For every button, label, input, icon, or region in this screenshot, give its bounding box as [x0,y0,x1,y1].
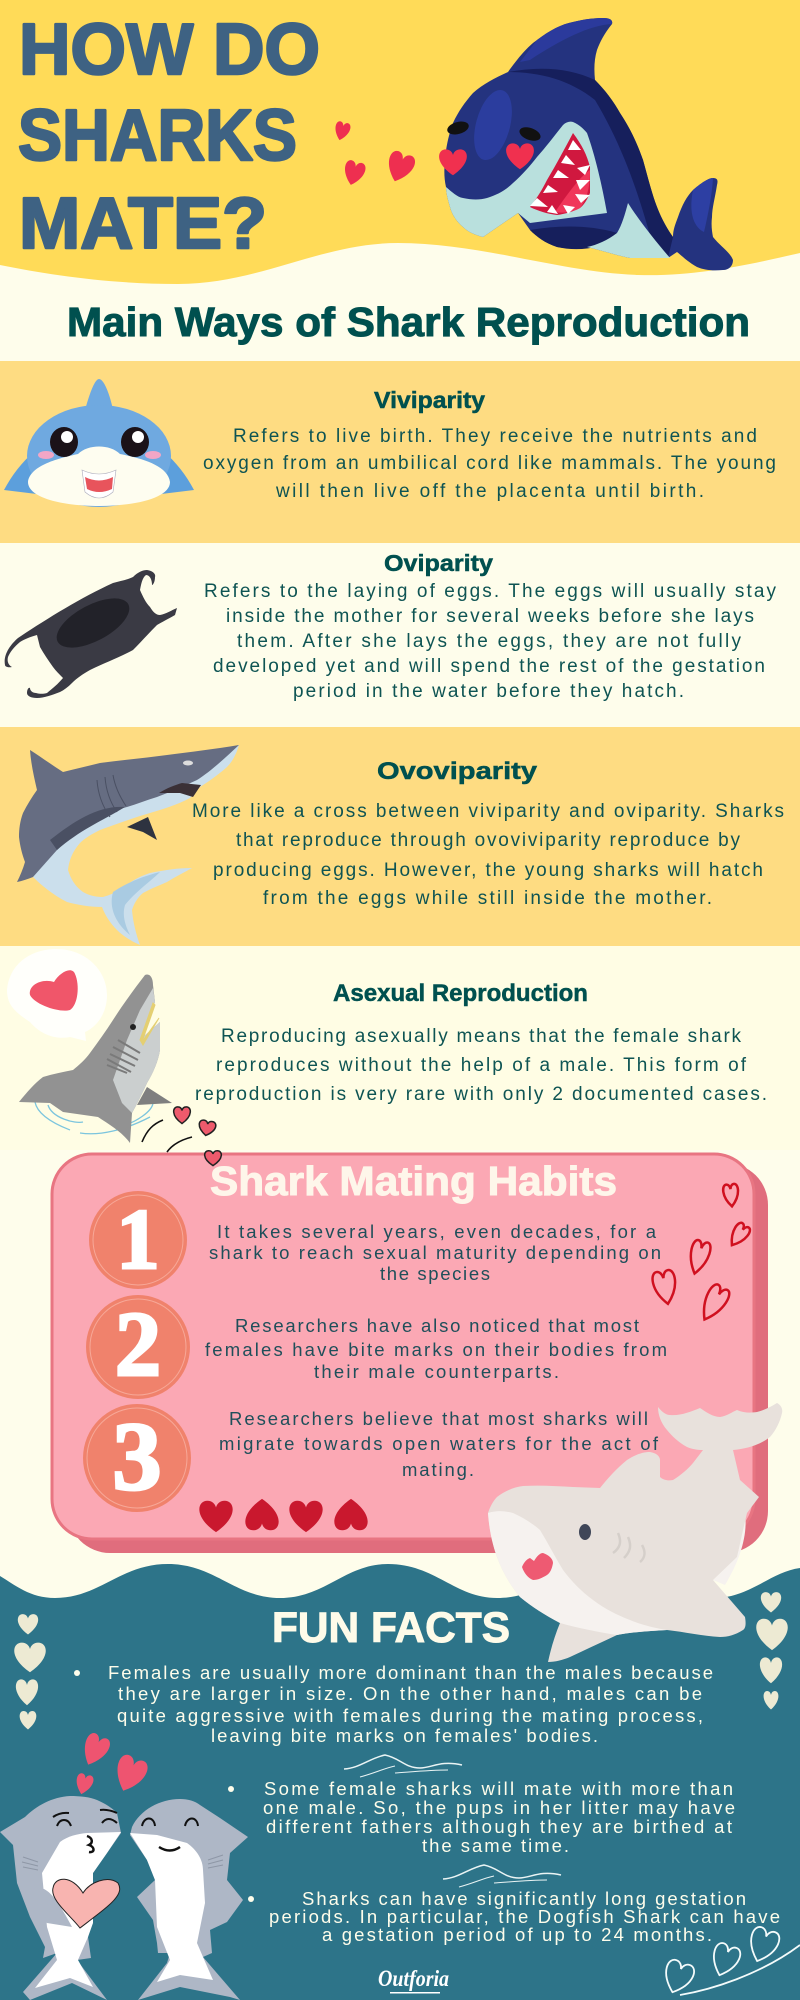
left shark [0,1796,121,2000]
text block: ovoviparity: from the eggs while still inside the mother. [263,888,712,909]
text block: viviparity: Refers to live birth. They receive the nutrients and [233,426,757,447]
right shark [130,1799,248,2000]
text block: fun fact 1: quite aggressive with females during the mating process, [117,1705,703,1726]
text block: ovoviparity: More like a cross between viviparity and oviparity. Sharks [192,801,784,822]
icon: cream scribble hearts right [756,1592,788,1710]
text block: fun fact 2 [228,1778,735,1856]
heading: shark mating habits: Shark Mating Habits [210,1158,617,1204]
text block: habit 2: Researchers have also noticed that most [235,1315,639,1336]
text block: habit 3 [219,1408,659,1480]
panel: shark mating habits card [52,1151,768,1553]
text block: ovoviparity [192,801,784,909]
icon: cream scribble hearts left [14,1614,46,1730]
icon: scribbled red hearts [199,1499,368,1532]
text block: habit 3: migrate towards open waters for the act of [219,1433,659,1454]
icon: grey shark in water [19,975,172,1143]
text block: habit 1 [209,1221,661,1284]
panel: oviparity [5,550,776,702]
title: MATE? [19,184,267,264]
text block: fun fact 2: Some female sharks will mate with more than [264,1778,733,1799]
text block: oviparity: period in the water before they hatch. [293,681,684,702]
number badge 2 [86,1293,190,1399]
number badge 3: 3 [112,1403,162,1511]
panel: viviparity [0,361,800,543]
icon: shark egg case [5,570,177,698]
text block: habit 1: It takes several years, even decades, for a [217,1221,657,1242]
text block: habit 3: Researchers believe that most sharks will [229,1408,648,1429]
heading: main ways of shark reproduction: Main Ways of Shark Reproduction [67,299,750,345]
number badge 2: 2 [115,1293,161,1395]
text block: fun fact 1 [74,1662,713,1746]
text block: habit 3: mating. [402,1459,474,1480]
text block: fun fact 3: Sharks can have significantly long gestation [302,1888,746,1909]
panel: yellow header wave [0,0,800,284]
icon: pink hearts over sharks [73,1731,150,1796]
text block: fun fact 3: periods. In particular, the Dogfish Shark can have [269,1906,780,1927]
title: SHARKS [18,96,297,176]
number badge 1: 1 [116,1191,160,1287]
icon: white shark [488,1403,782,1662]
text block: fun fact 3: a gestation period of up to 24 months. [322,1924,712,1945]
icon: white outline hearts bottom right [659,1925,800,1997]
text block: fun fact 1: Females are usually more dominant than the males because [108,1662,713,1683]
heading: fun facts: FUN FACTS [272,1604,510,1652]
text block: fun fact 2: one male. So, the pups in her litter may have [263,1797,735,1818]
text block: viviparity: oxygen from an umbilical cord like mammals. The young [203,453,776,474]
icon: kissing shark couple [0,1796,248,2000]
text block: habit 2: females have bite marks on their bodies from [205,1339,667,1360]
text block: fun fact 3 [248,1888,780,1945]
panel: asexual reproduction [0,946,800,1178]
text block: ovoviparity: that reproduce through ovoviviparity reproduce by [236,830,740,851]
text block: fun fact 1: leaving bite marks on females' bodies. [211,1725,598,1746]
text block: habit 2: their male counterparts. [314,1361,559,1382]
heart held by sharks [53,1879,120,1928]
text block: habit 2 [205,1315,667,1382]
text block: viviparity [203,426,776,502]
title: HOW DO [19,10,320,90]
text block: asexual reproduction [195,1026,767,1105]
text block: oviparity [204,581,776,702]
heading: asexual reproduction: Asexual Reproduction [333,980,588,1007]
text block: oviparity: developed yet and will spend the rest of the gestation [213,656,765,677]
text block: viviparity: will then live off the placenta until birth. [275,481,704,502]
number badge 3 [83,1403,191,1512]
number badge 1 [89,1191,187,1289]
text block: habit 1: shark to reach sexual maturity depending on [209,1242,661,1263]
text block: oviparity: inside the mother for several weeks before she lays [226,606,754,627]
text block: habit 1: the species [380,1263,490,1284]
icon: navy shark with hearts [332,18,733,270]
icon: speech bubble with heart [7,949,107,1041]
title [18,10,320,264]
icon: small flying hearts with trails [142,1107,216,1178]
text block: fun fact 1: they are larger in size. On the other hand, males can be [118,1683,702,1704]
icon: wave divider 2 [443,1865,561,1887]
heading: oviparity: Oviparity [384,550,493,576]
panel: fun facts teal background [0,1564,800,2000]
text block: ovoviparity: producing eggs. However, the young sharks will hatch [213,860,763,881]
text block: fun fact 2: different fathers although they are birthed at [266,1816,732,1837]
text block: asexual reproduction: Reproducing asexually means that the female shark [221,1026,742,1047]
icon: great white shark [17,745,239,945]
icon: baby blue shark [4,379,194,507]
text block: fun fact 2: the same time. [422,1835,569,1856]
text block: asexual reproduction: reproduction is very rare with only 2 documented cases. [195,1084,767,1105]
heading: viviparity: Viviparity [374,387,485,413]
icon: wave divider 1 [344,1755,462,1777]
text block: oviparity: them. After she lays the eggs, they are not fully [237,631,742,652]
heading: ovoviparity: Ovoviparity [377,758,538,785]
panel: ovoviparity [0,727,800,946]
logo: Outforia: Outforia [378,1966,449,1991]
icon: flying heart on card corner [205,1151,221,1166]
text block: asexual reproduction: reproduces without the help of a male. This form of [216,1055,747,1076]
icon: outlined red hearts [651,1184,752,1325]
text block: oviparity: Refers to the laying of eggs. The eggs will usually stay [204,581,776,602]
